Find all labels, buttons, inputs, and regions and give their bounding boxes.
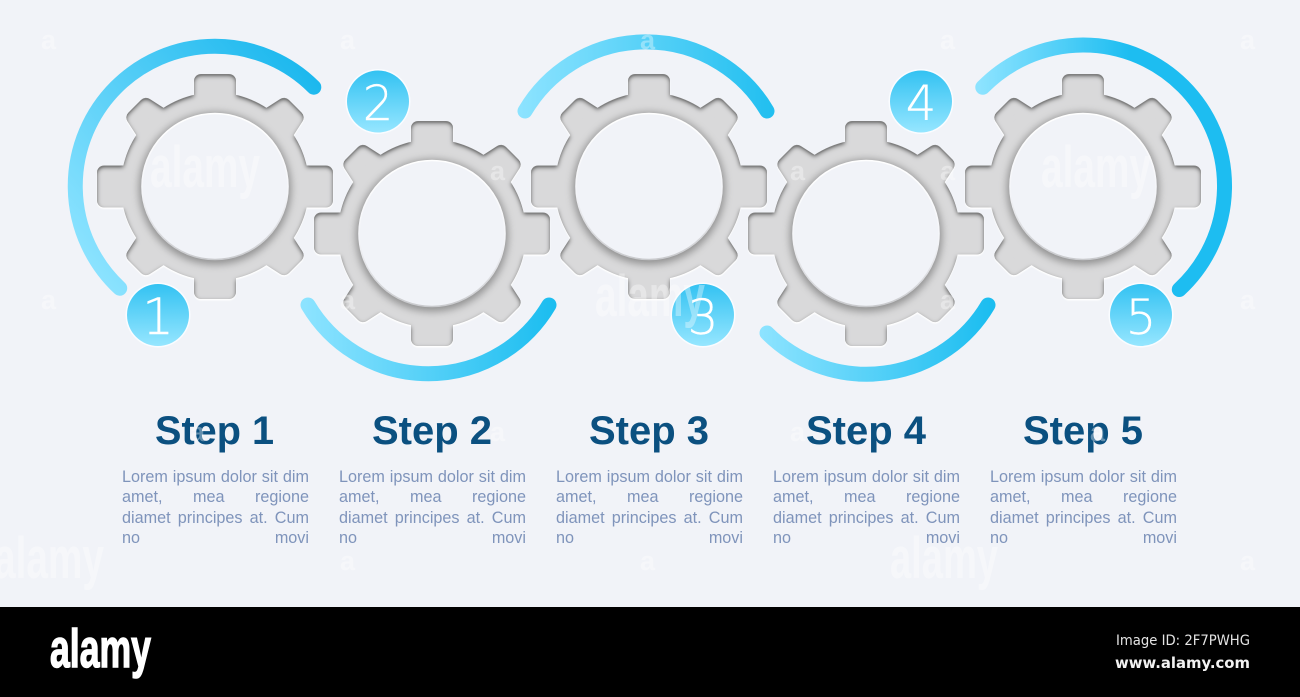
text block: step 3: no movi xyxy=(556,529,743,547)
arc 3 xyxy=(525,42,767,111)
arc 5 xyxy=(983,45,1225,290)
heading: Step 2: Step 2 xyxy=(372,409,492,453)
website: www.alamy.com xyxy=(1115,654,1250,672)
watermark: faint alamy marks: a xyxy=(490,156,506,186)
watermark: faint alamy marks: a xyxy=(190,417,206,447)
gear 4 xyxy=(748,121,984,346)
arc 2 xyxy=(308,305,549,374)
badge 2: 2 xyxy=(363,76,393,132)
watermark: faint alamy marks: a xyxy=(790,417,806,447)
footer bar xyxy=(0,607,1300,697)
image id: Image ID: 2F7PWHG xyxy=(1116,633,1250,649)
text block: step 4: diamet principes at. Cum xyxy=(773,509,960,527)
heading: Step 3: Step 3 xyxy=(589,409,709,453)
arc 4 xyxy=(767,305,988,374)
watermark: faint alamy marks xyxy=(0,25,1256,591)
text block: step 1: Lorem ipsum dolor sit dim xyxy=(122,468,309,486)
badge 4: 4 xyxy=(906,76,936,132)
watermark: faint alamy marks: alamy xyxy=(1041,135,1151,200)
logo: alamy: alamy xyxy=(50,619,151,679)
text block: step 5: no movi xyxy=(990,529,1177,547)
text block: step 5: Lorem ipsum dolor sit dim xyxy=(990,468,1177,486)
watermark: faint alamy marks: alamy xyxy=(890,526,998,591)
text block: step 2: diamet principes at. Cum xyxy=(339,509,526,527)
text block: step 1: no movi xyxy=(122,529,309,547)
watermark: faint alamy marks: a xyxy=(340,25,356,55)
text block: step 3 xyxy=(556,468,743,547)
heading: Step 5: Step 5 xyxy=(1023,409,1143,453)
watermark: faint alamy marks: a xyxy=(940,25,956,55)
arc 1 xyxy=(75,46,314,288)
watermark: faint alamy marks: a xyxy=(340,285,356,315)
text block: step 3: Lorem ipsum dolor sit dim xyxy=(556,468,743,486)
watermark: faint alamy marks: a xyxy=(1240,25,1256,55)
text block: step 2: Lorem ipsum dolor sit dim xyxy=(339,468,526,486)
text block: step 2: amet, mea regione xyxy=(339,488,526,506)
text block: step 4 xyxy=(773,468,960,547)
watermark: faint alamy marks: a xyxy=(640,546,656,576)
text block: step 4: amet, mea regione xyxy=(773,488,960,506)
text block: step 2: no movi xyxy=(339,529,526,547)
text block: step 5: diamet principes at. Cum xyxy=(990,509,1177,527)
text block: step 2 xyxy=(339,468,526,547)
watermark: faint alamy marks: a xyxy=(490,417,506,447)
heading: Step 1: Step 1 xyxy=(155,409,274,453)
badge 5 xyxy=(1108,282,1174,348)
badge 1 xyxy=(126,282,190,348)
badge 1: 1 xyxy=(142,288,174,346)
gear 3 xyxy=(531,74,767,299)
text block: step 5 xyxy=(990,468,1177,547)
text block: step 3: amet, mea regione xyxy=(556,488,743,506)
watermark: faint alamy marks: a xyxy=(1090,417,1106,447)
watermark: faint alamy marks: a xyxy=(940,156,956,186)
watermark: faint alamy marks: a xyxy=(1240,546,1256,576)
watermark: faint alamy marks: a xyxy=(790,156,806,186)
watermark: faint alamy marks: a xyxy=(940,285,956,315)
gear 1 xyxy=(97,74,333,299)
text block: step 5: amet, mea regione xyxy=(990,488,1177,506)
text block: step 4: no movi xyxy=(773,529,960,547)
watermark: faint alamy marks: a xyxy=(340,546,356,576)
text block: step 1: diamet principes at. Cum xyxy=(122,509,309,527)
text block: step 1 xyxy=(122,468,309,547)
badge 3 xyxy=(670,282,736,348)
gear 5 xyxy=(965,74,1201,299)
badge 4 xyxy=(888,69,954,134)
watermark: faint alamy marks: alamy xyxy=(595,264,705,329)
heading: Step 4: Step 4 xyxy=(806,409,927,453)
text block: step 3: diamet principes at. Cum xyxy=(556,509,743,527)
watermark: faint alamy marks: a xyxy=(1240,285,1256,315)
badge 3: 3 xyxy=(688,290,718,346)
watermark: faint alamy marks: a xyxy=(640,25,656,55)
text block: step 1: amet, mea regione xyxy=(122,488,309,506)
text block: step 4: Lorem ipsum dolor sit dim xyxy=(773,468,960,486)
watermark: faint alamy marks: a xyxy=(41,25,57,55)
badge 2 xyxy=(346,69,410,134)
watermark: faint alamy marks: alamy xyxy=(150,135,260,200)
badge 5: 5 xyxy=(1126,290,1156,346)
watermark: faint alamy marks: a xyxy=(41,285,57,315)
gear 2 xyxy=(314,121,550,346)
